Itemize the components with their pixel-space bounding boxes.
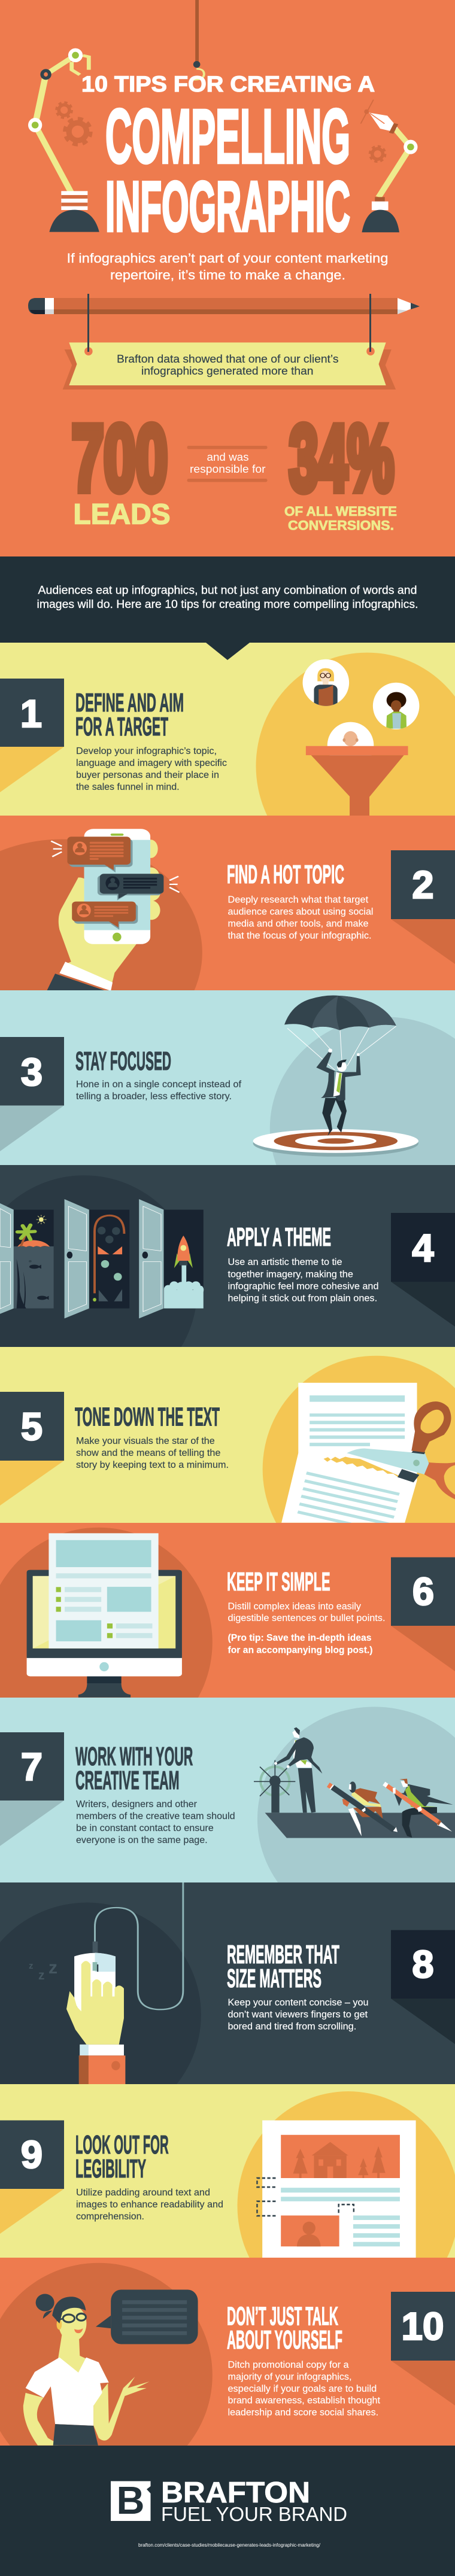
heading: DEFINE AND AIM: [75, 688, 184, 717]
illustration: parachute landing on target: [253, 996, 455, 1165]
panel: tip 10: [0, 2263, 455, 2446]
subtitle: repertoire, it’s time to make a change.: [110, 267, 345, 282]
illustration: captain and crew on ship: [254, 1707, 455, 1882]
body text: [76, 2188, 223, 2222]
number box 1: 1: [20, 692, 42, 735]
number box 2: [391, 850, 455, 964]
heading: [227, 2302, 342, 2355]
logo: Brafton: FUEL YOUR BRAND: [161, 2503, 347, 2525]
number box 7: [0, 1732, 64, 1846]
body text: together imagery, making the: [228, 1270, 353, 1279]
number box 5: 5: [21, 1405, 43, 1448]
stat: 34% conversions: OF ALL WEBSITE: [284, 504, 397, 519]
body text: story by keeping text to a minimum.: [76, 1460, 229, 1470]
body text: be in constant contact to ensure: [76, 1823, 214, 1833]
panel: tip 6: [0, 1527, 455, 1698]
panel: footer: [0, 2446, 455, 2576]
panel: tip 3: [0, 990, 455, 1165]
body text: [76, 746, 227, 792]
number box 3: 3: [21, 1050, 43, 1094]
intro text: [37, 584, 418, 611]
banner: [63, 294, 396, 390]
number box 5: [0, 1392, 64, 1506]
body text: especially if your goals are to build: [228, 2384, 377, 2394]
stat: 700 leads: [72, 406, 170, 530]
logo: Brafton: B: [117, 2478, 144, 2522]
panel: tip 1: [0, 643, 455, 816]
icon: sleeping z letters: z: [29, 1961, 34, 1971]
title: 10 TIPS FOR CREATING A: [81, 72, 375, 96]
body text: language and imagery with specific: [76, 758, 227, 768]
body text: brand awareness, establish thought: [228, 2396, 381, 2406]
illustration: scissors cutting text page: [262, 1356, 455, 1523]
banner: Brafton data showed that one of our client’s: [117, 353, 339, 365]
icon: sleeping z letters: [29, 1964, 57, 1979]
intro text: images will do. Here are 10 tips for creating more compelling infographics.: [37, 598, 418, 611]
body text: for an accompanying blog post.): [228, 1646, 372, 1655]
number box 8: [391, 1930, 455, 2044]
body text: bored and tired from scrolling.: [228, 2022, 356, 2032]
body text: [228, 1997, 369, 2032]
body text: helping it stick out from plain ones.: [228, 1294, 377, 1304]
body text: media and other tools, and make: [228, 919, 369, 929]
body text: [76, 1799, 235, 1845]
heading: FOR A TARGET: [75, 712, 168, 741]
panel: header: [0, 0, 455, 556]
body text: leadership and score social shares.: [228, 2408, 378, 2418]
number box 10: 10: [401, 2304, 444, 2348]
panel: tip 6: KEEP IT SIMPLE: [227, 1567, 330, 1596]
body text: everyone is on the same page.: [76, 1835, 208, 1845]
heading: [75, 2130, 169, 2183]
number box 7: 7: [21, 1745, 43, 1789]
connector text: responsible for: [190, 463, 266, 475]
body text: the sales funnel in mind.: [76, 782, 180, 792]
number box 6: 6: [412, 1570, 434, 1613]
body text: don’t want viewers fingers to get: [228, 2010, 368, 2020]
body text: Develop your infographic’s topic,: [76, 746, 217, 756]
body text: (Pro tip: Save the in-depth ideas: [228, 1633, 372, 1643]
heading: CREATIVE TEAM: [75, 1766, 180, 1795]
title: [81, 72, 375, 247]
body text: majority of your infographics,: [228, 2372, 352, 2382]
body text: Deeply research what that target: [228, 895, 369, 905]
body text: Use an artistic theme to tie: [228, 1257, 342, 1267]
panel: tip 7: [0, 1698, 455, 1882]
illustration: woman talking with speech bubble: [0, 2263, 213, 2446]
illustration: hand on computer mouse: [0, 1882, 201, 2084]
body text: images to enhance readability and: [76, 2200, 223, 2210]
number box 3: [0, 1037, 64, 1151]
body text: Hone in on a single concept instead of: [76, 1079, 242, 1090]
body text: Distill complex ideas into easily: [228, 1601, 361, 1612]
body text: [228, 1601, 386, 1655]
icon: robot arms, hook and gears: [28, 0, 417, 232]
illustration: page layout with padding: [237, 2091, 455, 2258]
panel: tip 5: [0, 1347, 455, 1523]
body text: show and the means of telling the: [76, 1448, 221, 1458]
number box 2: 2: [412, 863, 434, 907]
logo: Brafton: BRAFTON: [161, 2477, 310, 2509]
illustration: phone with chat bubbles: [0, 829, 202, 990]
connector text: [187, 446, 267, 482]
panel: tip 7: WORK WITH YOUR: [75, 1742, 193, 1771]
panel: intro band: [0, 556, 455, 660]
panel: tip 5: TONE DOWN THE TEXT: [75, 1403, 220, 1431]
heading: [75, 688, 184, 741]
stat: 34% conversions: CONVERSIONS.: [288, 518, 394, 533]
stat: 700 leads: LEADS: [73, 499, 170, 530]
panel: tip 4: APPLY A THEME: [227, 1222, 331, 1252]
body text: [76, 1079, 242, 1102]
panel: tip 9: LOOK OUT FOR: [75, 2130, 169, 2160]
body text: [228, 1257, 378, 1304]
number box 8: 8: [412, 1942, 434, 1986]
heading: SIZE MATTERS: [227, 1964, 321, 1993]
heading: DON’T JUST TALK: [227, 2302, 338, 2331]
panel: tip 8: REMEMBER THAT: [227, 1940, 339, 1969]
body text: Writers, designers and other: [76, 1799, 198, 1809]
body text: [76, 1436, 229, 1470]
body text: Keep your content concise – you: [228, 1997, 369, 2008]
stat: 700 leads: 700: [72, 406, 168, 510]
body text: audience cares about using social: [228, 907, 374, 917]
panel: tip 4: [0, 1165, 455, 1347]
number box 9: 9: [21, 2133, 43, 2176]
panel: tip 3: STAY FOCUSED: [75, 1047, 171, 1076]
illustration: sales funnel with personas: [256, 652, 455, 816]
body text: members of the creative team should: [76, 1811, 235, 1821]
body text: Ditch promotional copy for a: [228, 2360, 349, 2370]
connector text: and was: [207, 451, 249, 463]
subtitle: [67, 251, 388, 282]
panel: tip 9: [0, 2084, 455, 2258]
banner: infographics generated more than: [141, 365, 314, 377]
body text: comprehension.: [76, 2212, 144, 2222]
source url: brafton.com/clients/case-studies/mobilecause-generates-leads-infographic-marketing/: [138, 2542, 321, 2548]
number box 9: [0, 2121, 64, 2234]
panel: tip 8: [0, 1882, 455, 2084]
subtitle: If infographics aren’t part of your content marketing: [67, 251, 388, 266]
icon: pencil: [28, 298, 420, 314]
body text: Make your visuals the star of the: [76, 1436, 215, 1446]
icon: sleeping z letters: z: [38, 1969, 44, 1982]
body text: buyer personas and their place in: [76, 770, 219, 780]
stat: 34% conversions: [284, 406, 397, 533]
body text: [228, 2360, 381, 2418]
body text: that the focus of your infographic.: [228, 931, 371, 941]
panel: tip 2: [0, 829, 455, 990]
illustration: monitor with page layout: [0, 1527, 213, 1698]
number box 10: [391, 2292, 455, 2405]
icon: sleeping z letters: z: [48, 1958, 57, 1978]
body text: telling a broader, less effective story.: [76, 1091, 232, 1102]
heading: [227, 1940, 339, 1993]
intro text: Audiences eat up infographics, but not just any combination of words and: [38, 584, 417, 597]
number box 6: [391, 1557, 455, 1671]
body text: [228, 895, 374, 941]
number box 4: 4: [412, 1226, 434, 1270]
body text: Utilize padding around text and: [76, 2188, 210, 2198]
heading: [75, 1742, 193, 1795]
number box 1: [0, 679, 64, 792]
heading: LEGIBILITY: [75, 2154, 146, 2183]
body text: infographic feel more cohesive and: [228, 1282, 378, 1291]
illustration: three themed doors: [0, 1175, 204, 1347]
number box 4: [391, 1213, 455, 1327]
logo: Brafton: [111, 2477, 347, 2525]
body text: digestible sentences or bullet points.: [228, 1613, 386, 1623]
